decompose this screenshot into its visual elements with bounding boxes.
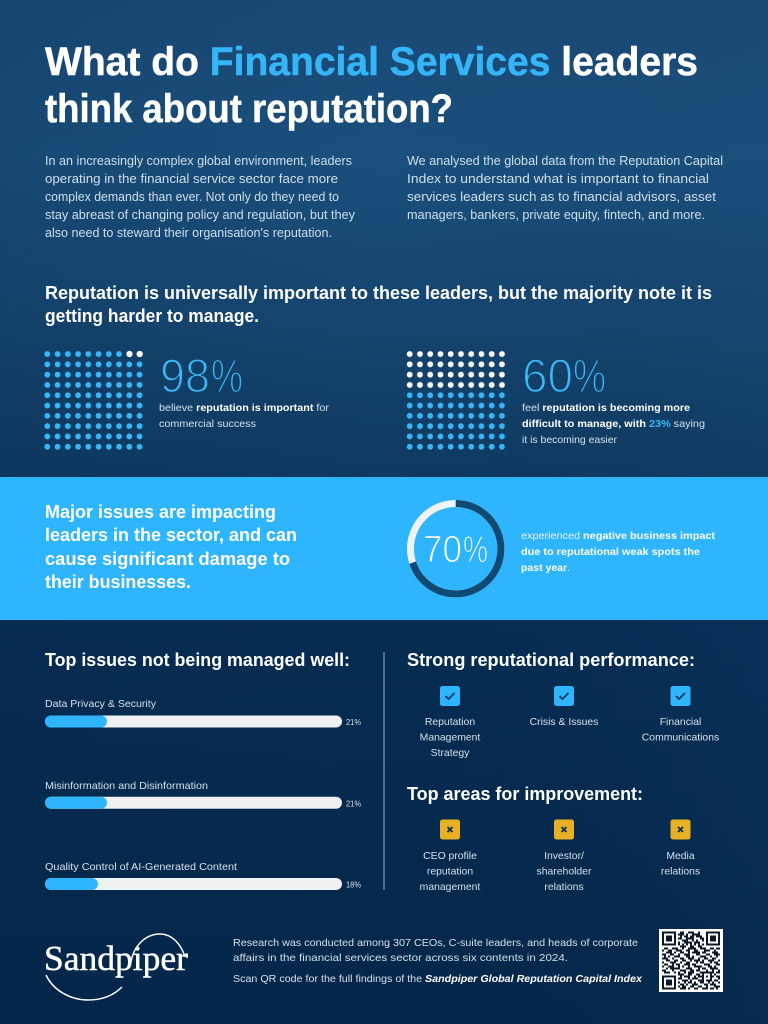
footer text: Research was conducted among 307 CEOs, C-suite leaders, and heads of corporate: [233, 938, 638, 949]
intro text left: [45, 154, 356, 240]
title: think about reputation?: [45, 87, 453, 131]
band heading: their businesses.: [45, 571, 191, 592]
band stat text: past year.: [521, 563, 570, 574]
intro text left: complex demands than ever. Not only do they need to: [45, 190, 339, 204]
stat: 98%: believe reputation is important for: [159, 403, 330, 414]
panel: major issues band: [0, 477, 768, 620]
item: media relations: relations: [661, 866, 700, 878]
heading: strong performance: Strong reputational performance:: [407, 649, 695, 670]
band heading: leaders in the sector, and can: [45, 524, 297, 545]
item: media relations: Media: [666, 851, 695, 862]
item: financial communications: Financial: [660, 717, 701, 728]
intro text right: services leaders such as to financial advisors, asset: [407, 190, 717, 204]
bar: AI content quality: [45, 862, 361, 890]
item: investor relations: Investor/: [544, 851, 584, 862]
bar: misinformation: [45, 781, 361, 809]
band stat text: due to reputational weak spots the: [521, 547, 700, 558]
bar: AI content quality: 18%: [346, 880, 361, 890]
donut chart: 70%: 70: [423, 529, 462, 571]
intro text right: managers, bankers, private equity, fintech, and more.: [407, 208, 705, 222]
footer text: affairs in the financial services sector across six contents in 2024.: [233, 953, 568, 964]
stat: 98%: %: [211, 349, 243, 402]
donut chart: 70%: %: [463, 529, 488, 571]
bar: data privacy: Data Privacy & Security: [45, 699, 157, 710]
bar: misinformation: 21%: [346, 800, 361, 808]
item: CEO profile: CEO profile: [423, 851, 477, 862]
intro text right: [407, 154, 723, 222]
footer text: Scan QR code for the full findings of the Sandpiper Global Reputation Capital Index: [233, 974, 643, 985]
section heading: reputation importance: getting harder to manage.: [45, 305, 259, 326]
item: financial communications: Communications: [642, 732, 719, 744]
logo: Sandpiper: [44, 934, 188, 1000]
intro text left: In an increasingly complex global environment, leaders: [45, 154, 352, 168]
item: crisis and issues: Crisis & Issues: [530, 717, 598, 728]
item: reputation management strategy: Strategy: [431, 748, 470, 759]
item: CEO profile: reputation: [427, 866, 473, 878]
stat: 60%: difficult to manage, with 23% saying: [522, 419, 705, 430]
stat: 60%: [522, 349, 705, 446]
intro text left: operating in the financial service sector face more: [45, 172, 338, 186]
intro text right: Index to understand what is important to financial: [407, 172, 709, 186]
band stat text: [521, 531, 716, 574]
logo: Sandpiper: Sandpiper: [44, 939, 188, 978]
item: investor relations: relations: [544, 882, 584, 893]
title: [45, 40, 698, 131]
bar: AI content quality: Quality Control of AI-Generated Content: [45, 862, 237, 873]
donut chart: 70%: [410, 504, 501, 594]
item: CEO profile: management: [420, 882, 480, 893]
stat: 98%: 98: [160, 349, 210, 402]
band heading: [45, 501, 297, 592]
band heading: Major issues are impacting: [45, 501, 276, 522]
item: media relations: [661, 820, 700, 878]
intro text left: also need to steward their organisation's reputation.: [45, 226, 332, 240]
item: investor relations: [537, 820, 592, 893]
item: CEO profile: [420, 820, 480, 893]
stat: 98%: [159, 349, 330, 430]
footer text: [233, 938, 643, 985]
dot matrix: 98%: [42, 349, 145, 452]
heading: top issues: Top issues not being managed well:: [45, 649, 350, 670]
item: reputation management strategy: Management: [420, 732, 480, 744]
item: crisis and issues: [530, 686, 598, 728]
section heading: reputation importance: [45, 282, 712, 326]
stat: 60%: it is becoming easier: [522, 435, 618, 446]
stat: 60%: feel reputation is becoming more: [522, 403, 690, 414]
stat: 60%: 60: [522, 349, 573, 402]
item: investor relations: shareholder: [537, 866, 592, 878]
item: reputation management strategy: Reputation: [425, 717, 475, 728]
band heading: cause significant damage to: [45, 548, 290, 569]
dot matrix: 60%: [405, 349, 507, 452]
stat: 60%: %: [573, 349, 606, 402]
item: reputation management strategy: [420, 686, 480, 759]
section heading: reputation importance: Reputation is universally important to these leaders, but the majority note it is: [45, 282, 712, 303]
stat: 98%: commercial success: [159, 419, 256, 430]
bar: misinformation: Misinformation and Disinformation: [45, 781, 208, 792]
bar: data privacy: 21%: [346, 718, 361, 727]
bar: data privacy: [45, 699, 361, 728]
QR code: [659, 929, 723, 992]
heading: areas for improvement: Top areas for improvement:: [407, 783, 643, 804]
title: What do Financial Services leaders: [45, 40, 698, 84]
intro text right: We analysed the global data from the Reputation Capital: [407, 154, 723, 168]
intro text left: stay abreast of changing policy and regulation, but they: [45, 208, 356, 222]
item: financial communications: [642, 686, 719, 744]
band stat text: experienced negative business impact: [521, 531, 716, 542]
